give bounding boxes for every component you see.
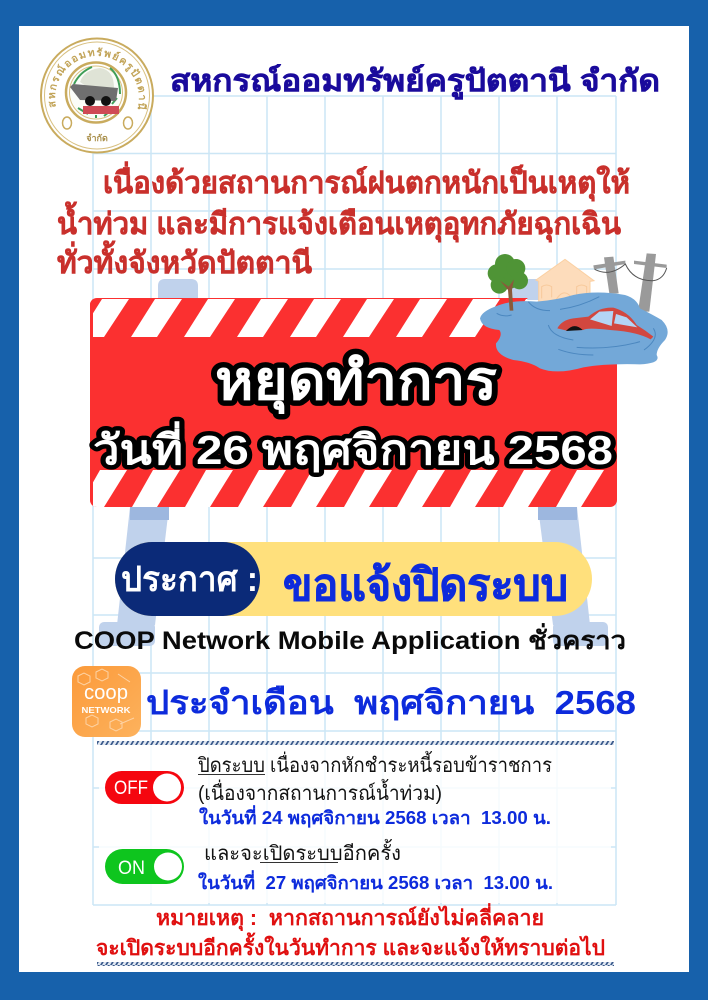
barrier board (78, 298, 617, 507)
headline: date: วันที่ 26 พฤศจิกายน 2568 (93, 421, 613, 473)
icon: coop network app: NETWORK (82, 705, 131, 715)
tree (488, 254, 528, 311)
poles (593, 253, 667, 312)
barrier legs (99, 279, 608, 646)
note: หมายเหตุ : หากสถานการณ์ยังไม่คลี่คลาย (156, 902, 544, 932)
announcement pill (115, 542, 592, 616)
puddle (480, 292, 668, 371)
closure date: ในวันที่ 24 พฤศจิกายน 2568 เวลา 13.00 น. (199, 805, 551, 828)
toggle: on (105, 849, 184, 884)
intro paragraph (57, 161, 630, 280)
app name line: COOP Network Mobile Application ชั่วคราว (74, 623, 626, 655)
closure reason: (เนื่องจากสถานการณ์น้ำท่วม) (198, 779, 442, 805)
soft white veil over lower grid (99, 745, 611, 903)
icon: coop network app (72, 666, 141, 737)
logo: cooperative seal (40, 38, 154, 154)
intro paragraph: น้ำท่วม และมีการแจ้งเตือนเหตุอุทกภัยฉุกเฉิน (57, 201, 621, 243)
logo side ornaments (62, 117, 72, 129)
logo cannon (70, 84, 118, 101)
reopening date: ในวันที่ 27 พฤศจิกายน 2568 เวลา 13.00 น. (198, 870, 553, 893)
month line: ประจำเดือน พฤศจิกายน 2568 (146, 684, 636, 721)
top white stripes (78, 299, 553, 337)
logo bottom text: จำกัด (86, 133, 108, 143)
car (557, 308, 653, 339)
water ripples (497, 297, 655, 355)
pill label: ประกาศ : (121, 560, 258, 599)
hatched divider (97, 741, 614, 745)
logo ring text: สหกรณ์ออมทรัพย์ครูปัตตานี (48, 47, 147, 110)
toggle: off: OFF (114, 778, 148, 799)
icon: coop network app: coop (84, 682, 128, 704)
closure reason: ปิดระบบ เนื่องจากหักชำระหนี้รอบข้าราชการ (198, 751, 552, 777)
headline: closed: หยุดทำการ (215, 351, 497, 415)
reopening text: และจะเปิดระบบอีกครั้ง (204, 839, 401, 865)
logo hill and foliage (80, 68, 114, 90)
intro paragraph: เนื่องด้วยสถานการณ์ฝนตกหนักเป็นเหตุให้ (103, 161, 630, 202)
logo abacus base (83, 106, 119, 114)
title: สหกรณ์ออมทรัพย์ครูปัตตานี จำกัด (170, 64, 660, 100)
toggle: off (105, 771, 184, 804)
toggle: on: ON (118, 858, 145, 879)
flood illustration (480, 253, 668, 371)
pill message: ขอแจ้งปิดระบบ (283, 561, 568, 610)
note: จะเปิดระบบอีกครั้งในวันทำการ และจะแจ้งให้ทราบต่อไป (96, 932, 605, 960)
note (96, 902, 605, 960)
hatched divider (97, 962, 614, 966)
house (527, 279, 541, 300)
bottom white stripes (79, 470, 604, 507)
closure reason (198, 751, 552, 805)
intro paragraph: ทั่วทั้งจังหวัดปัตตานี (57, 240, 312, 280)
background grid (93, 96, 616, 905)
